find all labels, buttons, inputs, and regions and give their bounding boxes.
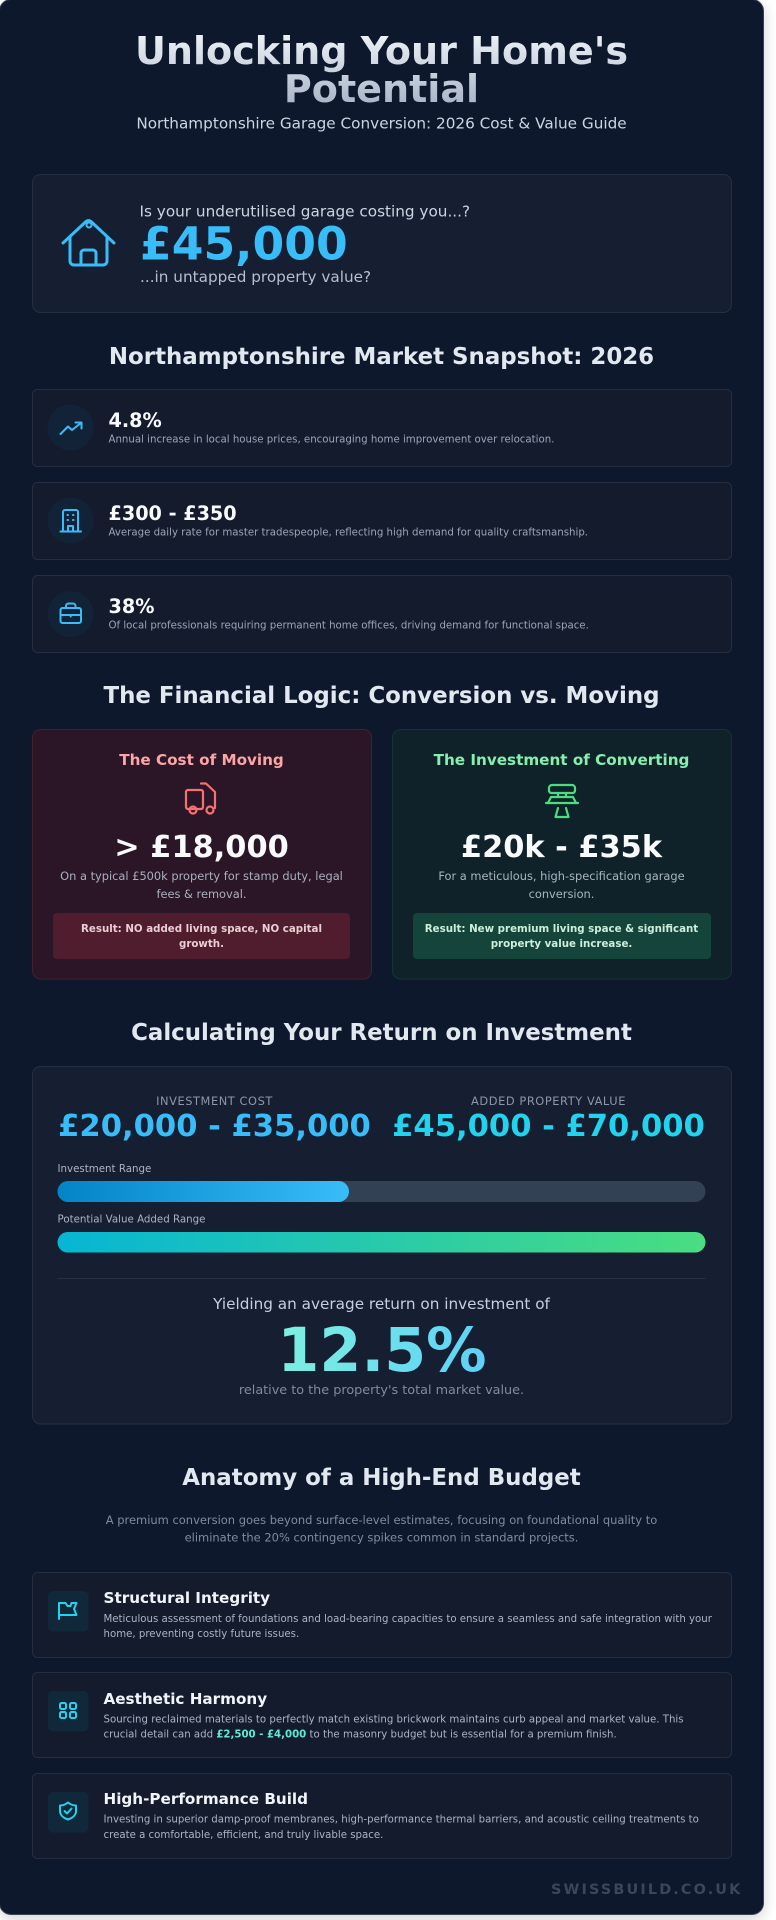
icon: house <box>63 220 114 265</box>
panel: structural integrity <box>32 1572 732 1658</box>
moving title: The Cost of Moving <box>119 751 284 769</box>
icon: trend up <box>48 404 94 450</box>
moving result: growth. <box>179 938 224 950</box>
budget card <box>32 1774 732 1858</box>
budget intro: A premium conversion goes beyond surface-level estimates, focusing on foundational quality to <box>106 1513 657 1527</box>
hero card <box>32 174 732 312</box>
card description: Meticulous assessment of foundations and load-bearing capacities to ensure a seamless and safe integration with your <box>104 1614 713 1625</box>
bar: investment range <box>58 1163 706 1202</box>
heading: ROI: Calculating Your Return on Investment <box>131 1020 632 1046</box>
subtitle: Northamptonshire Garage Conversion: 2026 Cost & Value Guide <box>136 114 627 132</box>
converting result <box>413 913 711 959</box>
converting title: The Investment of Converting <box>434 751 689 769</box>
stat value: £300 - £350 <box>108 502 237 525</box>
converting result: property value increase. <box>491 938 632 950</box>
moving result: Result: NO added living space, NO capital <box>81 923 322 935</box>
panel: stat home offices <box>32 576 732 652</box>
card description: Investing in superior damp-proof membranes, high-performance thermal barriers, and acoustic ceiling treatments to <box>104 1814 699 1826</box>
card description: crucial detail can add <box>104 1730 216 1740</box>
icon: truck <box>186 784 215 814</box>
hero figure: £45,000 <box>140 218 348 270</box>
investment cost figure: £20,000 - £35,000 <box>58 1109 371 1144</box>
stat description: Of local professionals requiring permanent home offices, driving demand for functional space. <box>108 620 589 632</box>
panel: hero statement <box>32 174 732 312</box>
budget intro: eliminate the 20% contingency spikes common in standard projects. <box>185 1530 578 1544</box>
ROI summary <box>212 1295 551 1398</box>
heading: financial logic: The Financial Logic: Conversion vs. Moving <box>103 683 660 709</box>
stat value: 38% <box>108 595 154 618</box>
converting figure: £20k - £35k <box>461 830 663 865</box>
panel: aesthetic harmony <box>32 1672 732 1758</box>
icon: workbench <box>546 785 578 817</box>
card title: Aesthetic Harmony <box>104 1690 267 1708</box>
icon: building <box>48 498 94 544</box>
card description: create a comfortable, efficient, and truly livable space. <box>104 1830 383 1841</box>
heading: market snapshot: Northamptonshire Market Snapshot: 2026 <box>109 344 654 370</box>
moving description: fees & removal. <box>156 887 247 901</box>
bar: investment range: Investment Range <box>58 1163 151 1175</box>
converting result: Result: New premium living space & significant <box>425 923 698 935</box>
added value figure: ADDED PROPERTY VALUE <box>471 1094 626 1108</box>
converting card <box>392 730 732 979</box>
hero question: Is your underutilised garage costing you...? <box>140 202 470 220</box>
panel: high-performance build <box>32 1774 732 1858</box>
card description: £2,500 - £4,000 to the masonry budget but is essential for a premium finish. <box>216 1730 617 1740</box>
panel: cost of moving <box>32 730 372 979</box>
moving card <box>32 730 372 979</box>
panel: stat house prices <box>32 390 732 466</box>
moving figure: > £18,000 <box>114 830 289 865</box>
moving result <box>53 913 350 959</box>
moving description: On a typical £500k property for stamp duty, legal <box>60 869 343 883</box>
heading: budget anatomy: Anatomy of a High-End Budget <box>182 1465 581 1491</box>
title block <box>135 29 628 132</box>
icon: flag <box>48 1591 88 1632</box>
bar: potential value <box>58 1214 706 1252</box>
panel: investment of converting <box>392 730 732 979</box>
card title: Structural Integrity <box>104 1589 270 1607</box>
budget card <box>32 1672 732 1758</box>
panel: stat day rate <box>32 482 732 560</box>
stat description: Annual increase in local house prices, encouraging home improvement over relocation. <box>108 434 554 446</box>
ROI summary: relative to the property's total market value. <box>239 1383 524 1398</box>
icon: shield <box>48 1792 88 1832</box>
stat description: Average daily rate for master tradespeople, reflecting high demand for quality craftsmanship. <box>108 528 588 538</box>
card description: home, preventing costly future issues. <box>104 1629 299 1640</box>
stat value: 4.8% <box>108 409 162 432</box>
ROI summary: Yielding an average return on investment of <box>212 1295 551 1313</box>
title: Potential <box>284 67 479 111</box>
panel: ROI calculator <box>32 1066 732 1424</box>
budget card <box>32 1572 732 1658</box>
card title: High-Performance Build <box>104 1790 308 1808</box>
converting description: For a meticulous, high-specification garage <box>438 869 685 883</box>
stat card <box>32 576 732 652</box>
watermark: SWISSBUILD.CO.UK <box>551 1882 742 1898</box>
card description: Sourcing reclaimed materials to perfectly match existing brickwork maintains curb appeal and market value. This <box>104 1714 684 1726</box>
stat card <box>32 390 732 466</box>
converting description: conversion. <box>529 887 594 901</box>
investment cost figure: INVESTMENT COST <box>156 1094 273 1108</box>
bar: potential value: Potential Value Added Range <box>58 1214 205 1226</box>
icon: grid <box>48 1691 88 1732</box>
stat card <box>32 482 732 560</box>
hero follow-up: ...in untapped property value? <box>140 268 371 286</box>
added value figure: £45,000 - £70,000 <box>392 1109 705 1144</box>
ROI summary: 12.5% <box>277 1316 487 1386</box>
title: Unlocking Your Home's <box>135 29 628 73</box>
icon: briefcase <box>48 591 94 637</box>
ROI card <box>32 1066 732 1424</box>
